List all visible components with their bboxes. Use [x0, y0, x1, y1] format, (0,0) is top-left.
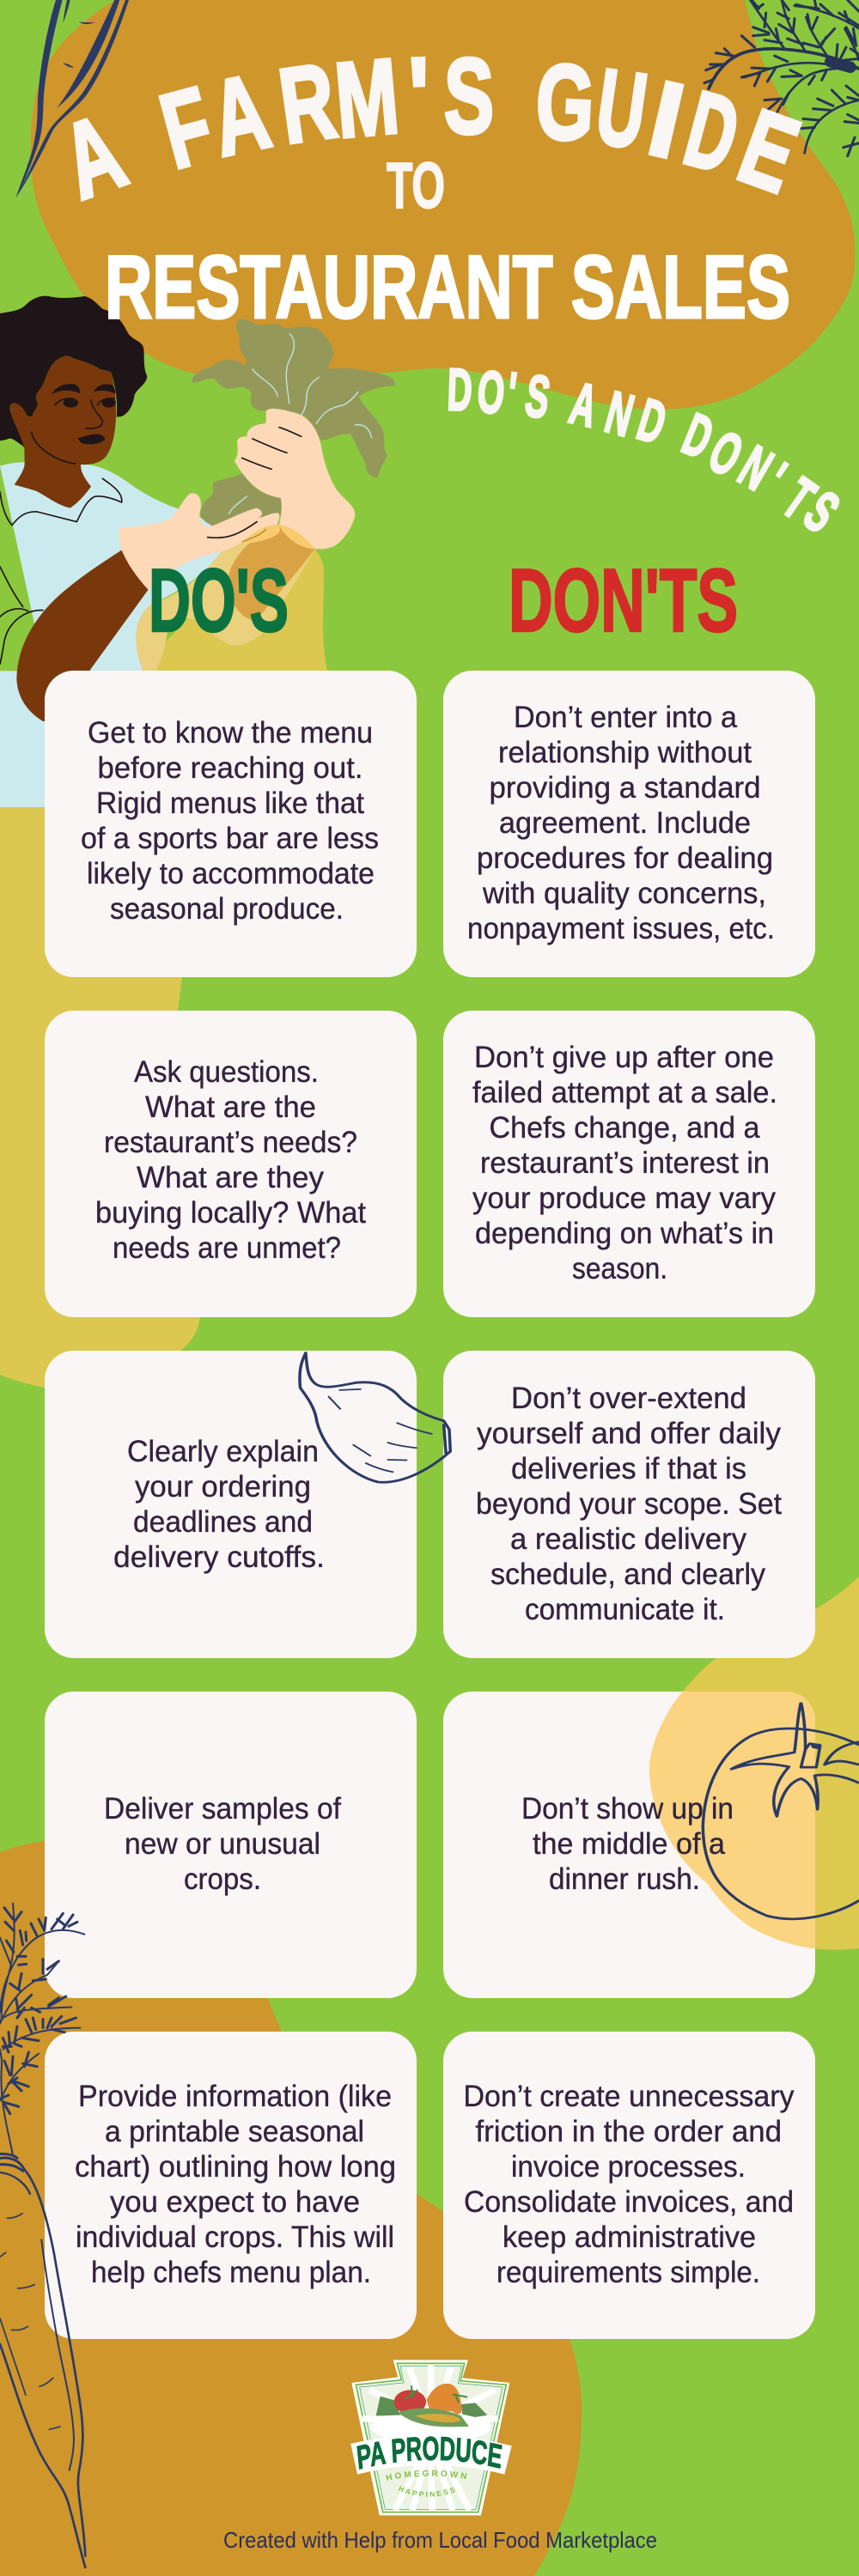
- sun rays: [362, 2366, 498, 2510]
- background: yellow tomato blob: [649, 1577, 859, 1950]
- shirt: [0, 462, 223, 807]
- card row 1 right: with quality concerns,: [482, 877, 766, 910]
- subtitle: Do's and Don'ts arc: [447, 356, 851, 545]
- card row 4 right with blob overlap: Don’t show up in: [521, 1792, 734, 1826]
- card row 2 right: restaurant’s interest in: [480, 1146, 770, 1180]
- card row 5 left: individual crops. This will: [76, 2221, 394, 2254]
- greens: [192, 319, 395, 477]
- icon: tomato outline: [703, 1703, 859, 1919]
- card row 1 right: procedures for dealing: [477, 841, 773, 875]
- card row 1 left: Get to know the menu: [88, 716, 373, 750]
- carrot top left: [15, 0, 129, 198]
- banner: [350, 2435, 512, 2475]
- text: S: [444, 38, 494, 156]
- text: F: [149, 65, 224, 191]
- text: A: [564, 370, 603, 440]
- card row 1 right: agreement. Include: [499, 806, 751, 840]
- card row 4 right with blob overlap: [443, 1692, 815, 1998]
- logo: PA Produce keystone badge: [350, 2360, 512, 2516]
- card row 4 right with blob overlap: the middle of a: [533, 1827, 726, 1861]
- pale blob over shirt: [136, 525, 315, 671]
- card row 3 right: deliveries if that is: [511, 1452, 746, 1485]
- text: G: [533, 42, 597, 164]
- text: S: [792, 478, 851, 545]
- card row 2 right: depending on what’s in: [475, 1217, 774, 1250]
- title: TO: TO: [387, 149, 445, 222]
- illustration: woman holding greens: [0, 296, 395, 807]
- card row 2 left: Ask questions.: [134, 1055, 319, 1089]
- card row 5 left: help chefs menu plan.: [91, 2256, 371, 2289]
- background: ochre top blob: [31, 0, 855, 410]
- card row 4 left: Deliver samples of: [104, 1792, 341, 1826]
- card row 1 right: Don’t enter into a: [514, 701, 738, 734]
- card row 2 left: What are the: [145, 1091, 316, 1124]
- card row 4 left: new or unusual: [125, 1827, 320, 1861]
- neck and face: [10, 355, 116, 508]
- collar and sleeve lines: [0, 478, 122, 664]
- card row 1 left: seasonal produce.: [110, 892, 344, 926]
- text: O: [475, 358, 507, 427]
- card row 3 right: [443, 1351, 815, 1658]
- card row 2 right: your produce may vary: [472, 1182, 776, 1215]
- card row 1 left: [45, 671, 417, 977]
- keystone shield: [351, 2360, 509, 2515]
- card row 4 left: crops.: [184, 1862, 261, 1896]
- carrot foliage top right: [704, 0, 859, 156]
- card row 3 right: yourself and offer daily: [477, 1417, 781, 1450]
- card row 2 right: Chefs change, and a: [490, 1111, 760, 1145]
- background: ochre bottom blob: [0, 1841, 582, 2576]
- card row 5 left: a printable seasonal: [105, 2115, 364, 2148]
- text: D: [631, 386, 673, 457]
- card row 2 right: season.: [572, 1252, 667, 1285]
- card row 5 right: Consolidate invoices, and: [464, 2185, 794, 2219]
- text: U: [589, 47, 654, 172]
- icon: garlic clove outline: [300, 1353, 450, 1482]
- text: ': [503, 361, 520, 427]
- footer credit: Created with Help from Local Food Marketplace: [223, 2527, 657, 2553]
- card row 3 right: Don’t over-extend: [511, 1382, 746, 1415]
- logo: PA Produce keystone badge: HAPPINESS: [399, 2485, 455, 2497]
- card row 5 right: Don’t create unnecessary: [464, 2080, 795, 2113]
- carrot body bottom left: [0, 2154, 85, 2567]
- card row 4 left: [45, 1692, 417, 1998]
- card row 2 left: buying locally? What: [95, 1196, 366, 1230]
- card row 5 right: requirements simple.: [497, 2256, 760, 2289]
- card row 5 left: [45, 2032, 417, 2339]
- card row 1 left: before reaching out.: [98, 751, 362, 785]
- card row 2 left: [45, 1011, 417, 1317]
- card row 2 left: needs are unmet?: [113, 1231, 341, 1265]
- arm: [16, 550, 149, 721]
- logo: PA Produce keystone badge: HOMEGROWN: [386, 2470, 467, 2481]
- card row 5 right: keep administrative: [503, 2221, 756, 2254]
- card row 5 left: chart) outlining how long: [75, 2150, 396, 2184]
- card row 5 left: Provide information (like: [78, 2080, 392, 2113]
- heading: Don'ts: DON'TS: [509, 551, 738, 651]
- card row 3 right: communicate it.: [525, 1593, 725, 1626]
- card row 1 right: providing a standard: [490, 771, 761, 805]
- vegetables: [376, 2397, 400, 2415]
- card row 1 left: Rigid menus like that: [96, 787, 364, 820]
- card row 3 right: beyond your scope. Set: [476, 1487, 782, 1521]
- card row 3 left: [45, 1351, 417, 1658]
- PA PRODUCE wordmark: [356, 2436, 503, 2470]
- text: O: [699, 418, 752, 489]
- HAPPINESS: [398, 2488, 464, 2497]
- HOMEGROWN: [387, 2476, 475, 2481]
- card row 2 left: What are they: [137, 1161, 324, 1194]
- text: E: [725, 88, 813, 216]
- card row 1 right: nonpayment issues, etc.: [467, 912, 775, 945]
- card row 1 right: [443, 671, 815, 977]
- card row 3 right: a realistic delivery: [510, 1522, 746, 1556]
- text: D: [447, 356, 473, 423]
- card row 2 left: restaurant’s needs?: [104, 1126, 357, 1159]
- card row 1 right: relationship without: [498, 736, 752, 769]
- card row 1 left: of a sports bar are less: [81, 822, 379, 855]
- text: N: [728, 434, 783, 503]
- card row 2 right: [443, 1011, 815, 1317]
- heading: Do's: DO'S: [149, 551, 289, 651]
- text: ': [753, 451, 796, 511]
- card row 1 left: likely to accommodate: [87, 857, 375, 890]
- hair: [0, 296, 147, 448]
- card row 5 right: [443, 2032, 815, 2339]
- card row 4 right with blob overlap: dinner rush.: [549, 1862, 700, 1896]
- text: N: [599, 379, 640, 449]
- card row 3 left: deadlines and: [133, 1505, 313, 1539]
- card row 5 left: you expect to have: [110, 2185, 360, 2219]
- text: D: [674, 401, 722, 471]
- card row 5 right: invoice processes.: [511, 2150, 746, 2184]
- PA PRODUCE wordmark: PA PRODUCE: [356, 2436, 503, 2470]
- background: yellow left blob: [0, 525, 327, 1393]
- text: R: [272, 41, 343, 167]
- text: A: [48, 92, 139, 222]
- title: A Farm's Guide arc: [48, 36, 813, 222]
- text: T: [771, 465, 826, 532]
- text: D: [673, 70, 751, 197]
- carrot foliage bottom left: [0, 1904, 84, 2155]
- text: ': [407, 36, 431, 155]
- eyes, brows, nose, mouth: [52, 384, 116, 444]
- card row 3 left: Clearly explain: [127, 1435, 319, 1468]
- open hand: [119, 493, 279, 590]
- card row 3 right: schedule, and clearly: [490, 1558, 765, 1591]
- text: M: [331, 37, 403, 161]
- hand holding greens: [235, 409, 355, 549]
- text: I: [638, 59, 694, 181]
- card row 2 right: Don’t give up after one: [474, 1041, 774, 1074]
- card row 5 right: friction in the order and: [476, 2115, 782, 2148]
- card row 3 left: delivery cutoffs.: [113, 1540, 325, 1574]
- card row 2 right: failed attempt at a sale.: [472, 1076, 777, 1109]
- text: S: [521, 362, 554, 431]
- text: A: [202, 52, 279, 179]
- card row 3 left: your ordering: [135, 1470, 311, 1504]
- ochre overlap: [228, 526, 315, 621]
